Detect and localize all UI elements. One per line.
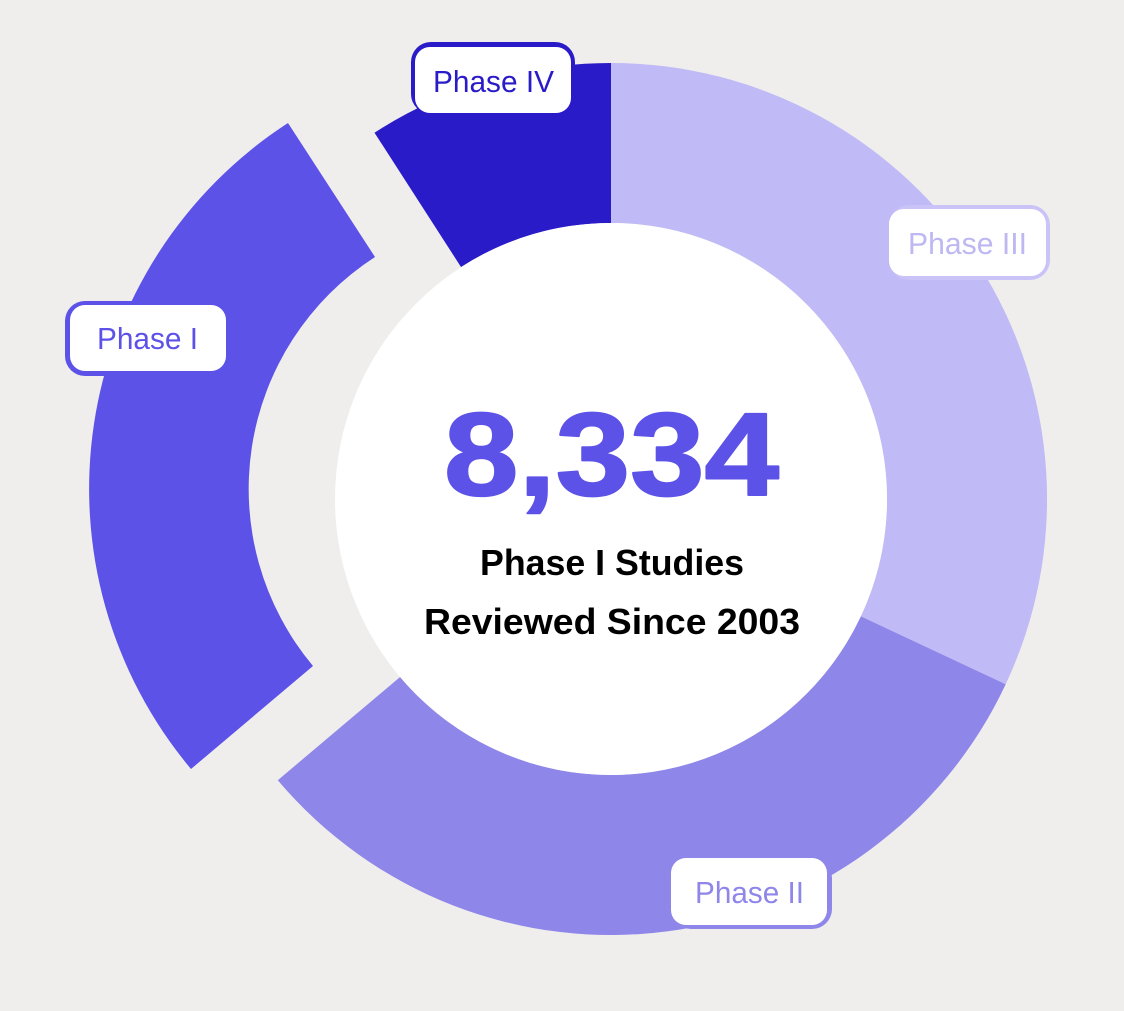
segment: Phase IV <box>374 63 611 267</box>
label: Phase II: Phase II <box>695 875 804 910</box>
segment: Phase I (exploded) <box>89 123 375 769</box>
label: Phase II <box>671 858 832 929</box>
label: Phase I: Phase I <box>97 321 198 356</box>
label: Phase III: Phase III <box>908 226 1027 261</box>
segment: Phase III <box>611 63 1047 684</box>
center caption line 1: Phase I Studies <box>480 542 744 583</box>
center circle <box>335 223 887 775</box>
center caption line 2: Reviewed Since 2003 <box>424 601 800 642</box>
segment: Phase II <box>278 616 1006 935</box>
label: Phase III <box>889 205 1050 280</box>
label: Phase I <box>65 301 229 376</box>
label: Phase IV <box>411 42 575 114</box>
center stat: 8,334: 8,334 <box>444 389 779 521</box>
label: Phase IV: Phase IV <box>433 64 554 99</box>
